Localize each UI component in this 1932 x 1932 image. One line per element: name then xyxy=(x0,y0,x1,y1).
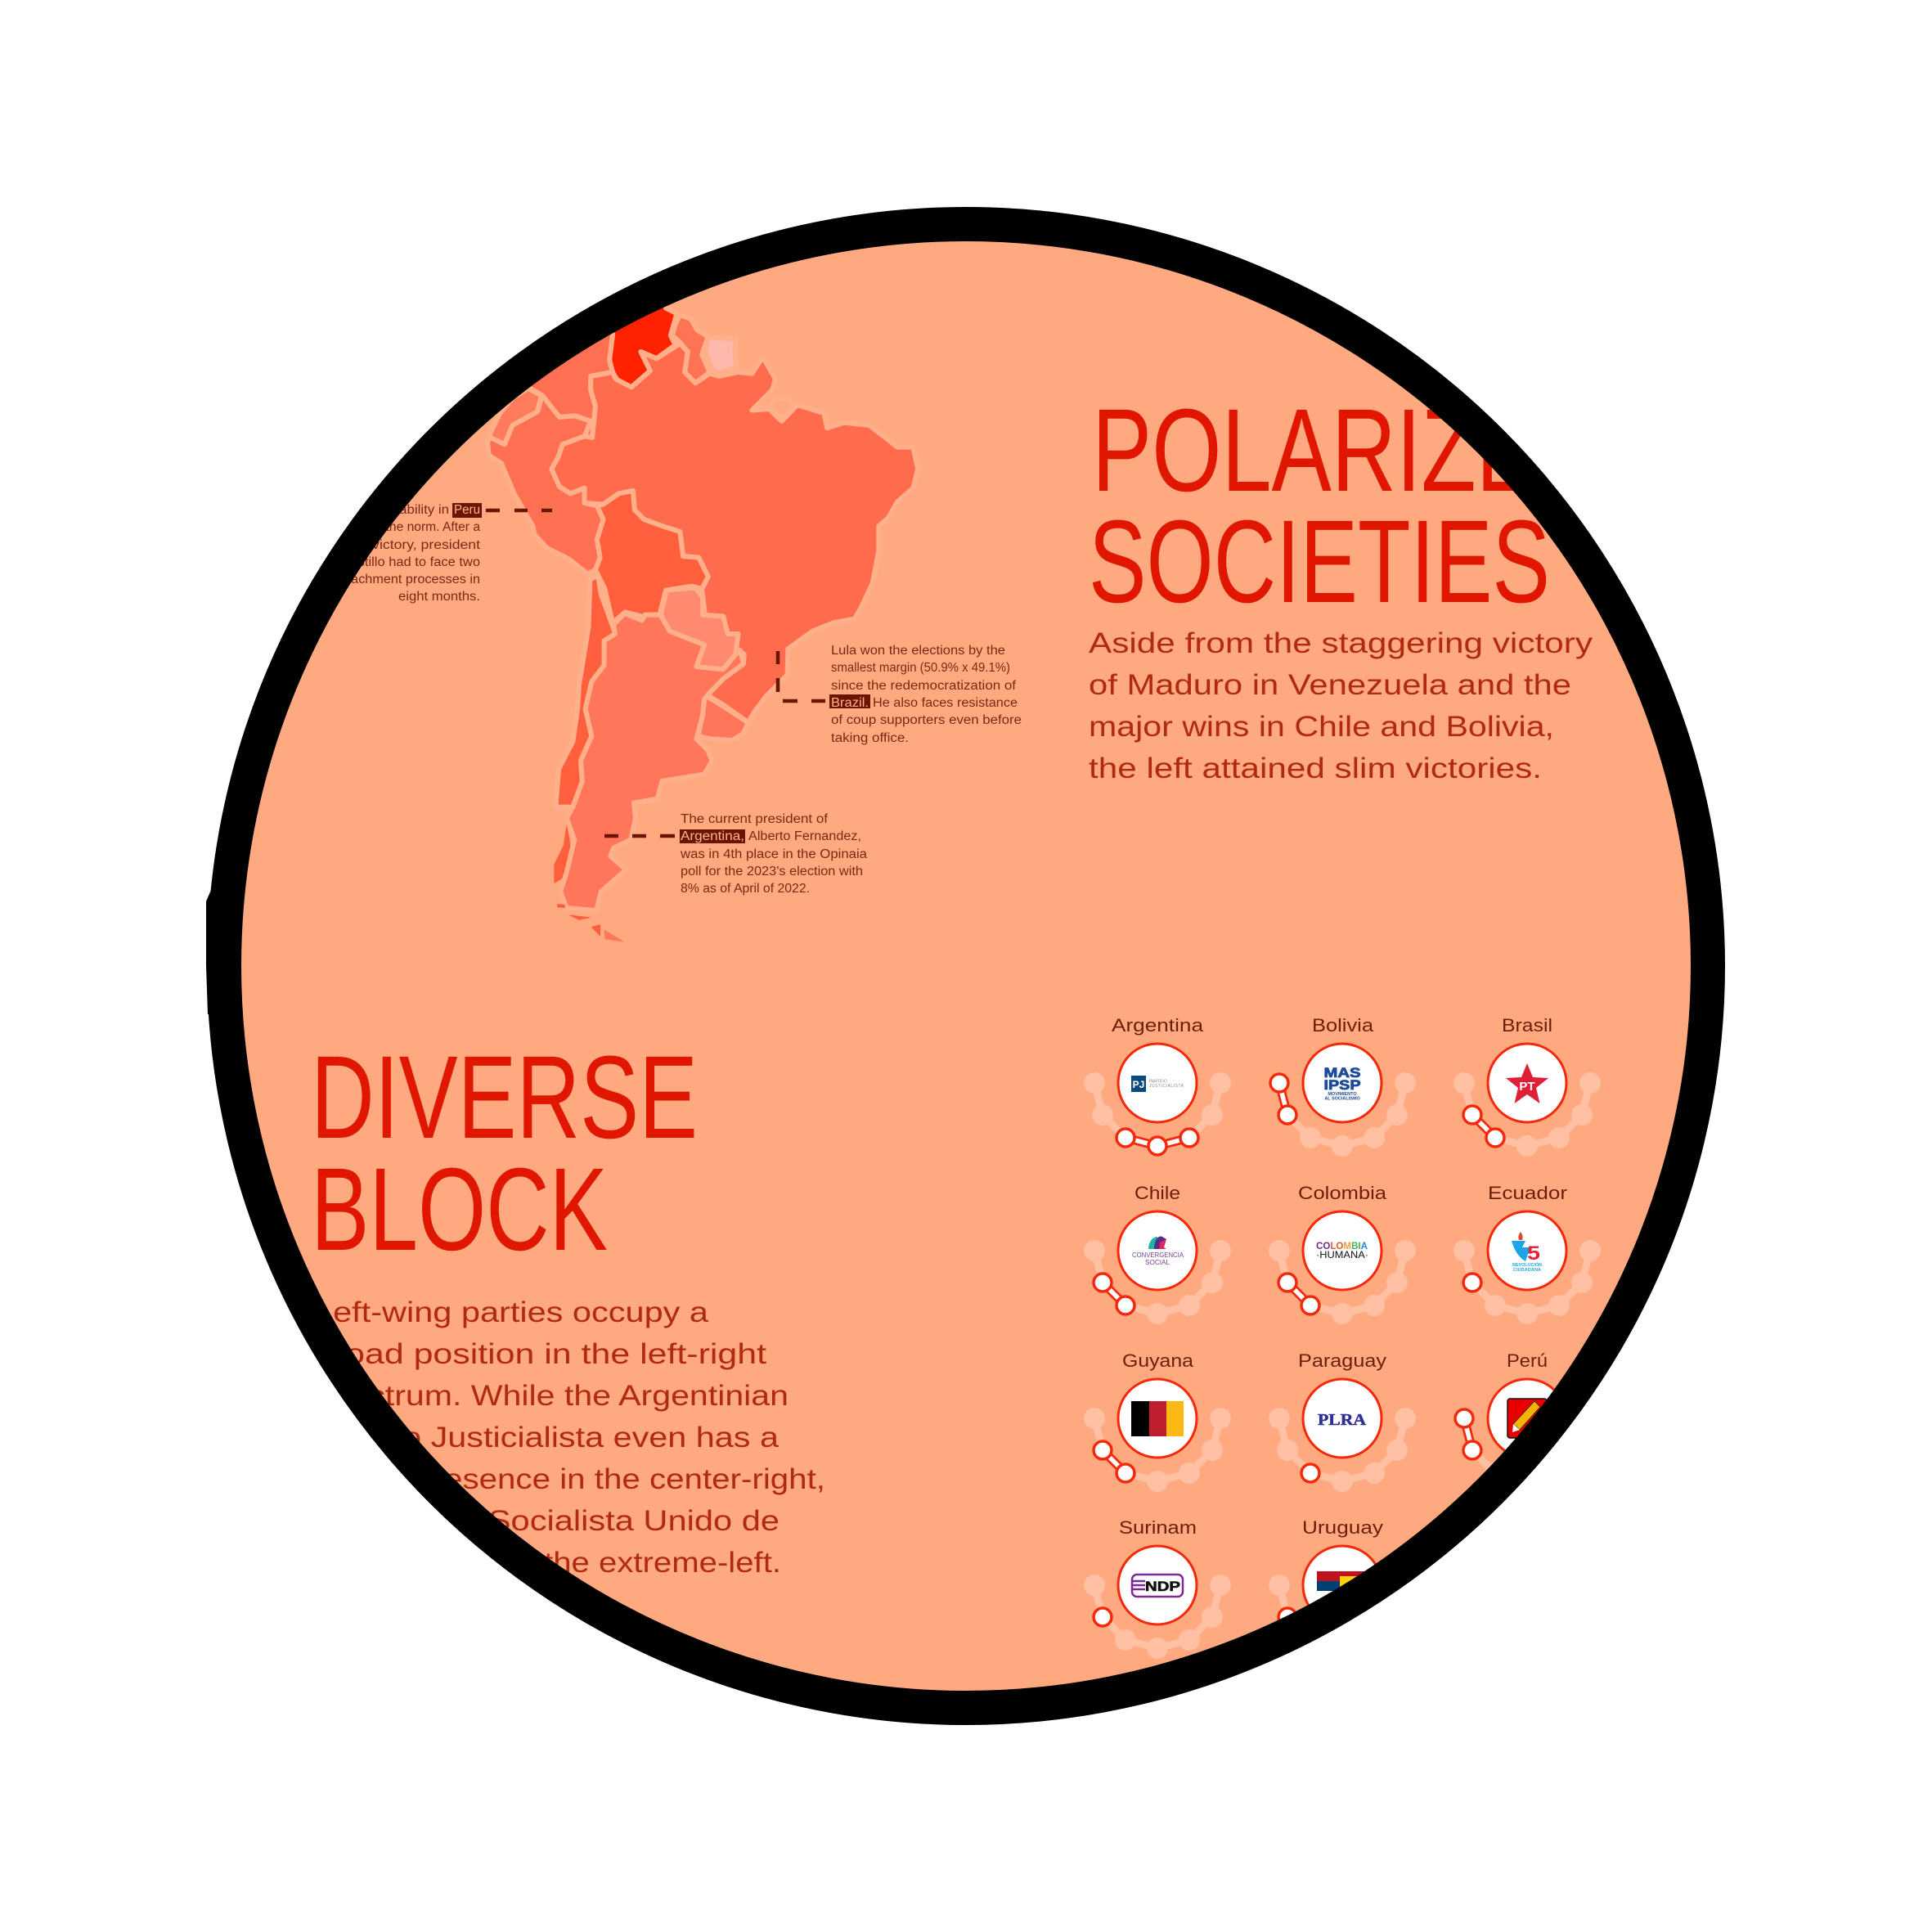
Chile south xyxy=(554,824,571,883)
party: Bolivia: MOVIMIENTO xyxy=(1328,1092,1357,1097)
black ring frame xyxy=(206,224,1708,1708)
Guyana xyxy=(672,315,710,383)
party: Surinam: NDP xyxy=(1145,1579,1180,1594)
text block: diverse block: Left-wing parties occupy a xyxy=(314,1296,709,1328)
Argentina text: was in 4th place in the Opinaia xyxy=(680,847,867,861)
dashed leader Brazil xyxy=(778,651,825,701)
party: Brasil: Brasil xyxy=(1502,1015,1552,1036)
heading: Diverse Block xyxy=(317,1055,694,1251)
party: Chile: Chile xyxy=(1134,1183,1180,1203)
dashed leader Peru xyxy=(486,509,552,512)
party: Bolivia xyxy=(1269,1015,1416,1157)
text block: diverse block: broad position in the left-right xyxy=(314,1338,766,1370)
Bolivia xyxy=(595,491,708,623)
party: Colombia: Colombia xyxy=(1298,1183,1387,1203)
party: Paraguay: PLRA xyxy=(1318,1411,1367,1429)
party: Ecuador: CIUDADANA xyxy=(1513,1268,1541,1273)
clipped content xyxy=(301,278,1601,1659)
heading: Diverse Block: DIVERSE xyxy=(311,1031,698,1163)
Peru text xyxy=(352,504,481,604)
party: Paraguay xyxy=(1269,1350,1416,1492)
party: Ecuador: 5 xyxy=(1527,1242,1540,1265)
Brazil text: taking office. xyxy=(831,731,909,745)
Colombia xyxy=(531,335,610,435)
Argentina text: Argentina, xyxy=(681,829,744,843)
Brazil text xyxy=(831,644,1022,745)
party: Ecuador: REVOLUCIÓN xyxy=(1512,1261,1542,1268)
text block: polarized societies: major wins in Chile and Bolivia, xyxy=(1089,711,1554,743)
party: Colombia: COLOMBIA xyxy=(1316,1240,1368,1251)
highlight Argentina xyxy=(680,829,745,843)
party: Perú: Perú xyxy=(1507,1350,1548,1371)
party: Uruguay xyxy=(1269,1517,1416,1659)
Brazil text: Brazil. xyxy=(831,696,869,710)
Peru xyxy=(487,395,604,574)
map of South America xyxy=(481,278,918,942)
Peru text: tight victory, president xyxy=(341,538,481,552)
party: Argentina: Argentina xyxy=(1112,1015,1204,1036)
Argentina xyxy=(560,613,744,910)
party: Ecuador: Ecuador xyxy=(1488,1183,1567,1203)
Argentina text xyxy=(680,812,867,896)
text block: diverse block: spectrum. While the Argentinian xyxy=(314,1380,789,1412)
party: Colombia: ·HUMANA· xyxy=(1316,1249,1368,1260)
party: Chile: CONVERGENCIA xyxy=(1132,1251,1184,1259)
Chile xyxy=(555,575,615,807)
Brazil text: of coup supporters even before xyxy=(831,713,1022,727)
Peru text: eight months. xyxy=(398,590,480,604)
party: Ecuador xyxy=(1453,1183,1601,1324)
party: Uruguay: Uruguay xyxy=(1302,1517,1383,1538)
Peru text: has been the norm. After a xyxy=(330,520,480,534)
text block: polarized societies: of Maduro in Venezuela and the xyxy=(1089,669,1571,701)
heading: Polarized Societies xyxy=(1093,409,1546,604)
party: Argentina: PJ xyxy=(1133,1079,1144,1090)
party: Argentina: PARTIDO xyxy=(1149,1080,1167,1085)
highlight Peru xyxy=(452,503,482,518)
text block: polarized societies xyxy=(1089,627,1593,784)
party: Paraguay: Paraguay xyxy=(1298,1350,1386,1371)
Peru text: Peru xyxy=(454,503,480,517)
party: Argentina xyxy=(1084,1015,1231,1157)
highlight Brazil xyxy=(829,694,870,708)
Brazil text: He also faces resistance xyxy=(873,696,1018,710)
heading: Polarized Societies: POLARIZED xyxy=(1092,384,1601,516)
background disc xyxy=(230,230,1702,1702)
Peru text: Instability in xyxy=(377,503,449,517)
text block: polarized societies: Aside from the staggering victory xyxy=(1089,627,1593,659)
party: Argentina: JUSTICIALISTA xyxy=(1149,1084,1184,1089)
Tierra del Fuego xyxy=(557,904,625,942)
heading: Diverse Block: BLOCK xyxy=(311,1143,608,1275)
Suriname xyxy=(705,337,736,374)
party: Bolivia: AL SOCIALISMO xyxy=(1324,1096,1361,1101)
Argentina text: Alberto Fernandez, xyxy=(748,829,861,843)
annotation: Brazil xyxy=(778,644,1022,745)
Brazil text: since the redemocratization of xyxy=(831,679,1017,693)
dashed leader Argentina xyxy=(604,834,675,838)
Venezuela xyxy=(607,306,679,384)
annotation: Peru xyxy=(352,503,552,604)
annotation: Argentina xyxy=(604,812,867,896)
party: Chile xyxy=(1084,1183,1231,1324)
party: Surinam: Surinam xyxy=(1119,1517,1197,1538)
text block: diverse block: Venezuela is in the extreme-left. xyxy=(314,1547,781,1579)
Brazil xyxy=(551,344,918,722)
Brazil text: smallest margin (50.9% x 49.1%) xyxy=(831,661,1010,675)
Peru text: impeachment processes in xyxy=(322,573,480,586)
text block: diverse block: Partido Justicialista even has a xyxy=(314,1422,780,1453)
Ecuador xyxy=(487,389,541,444)
Amazon river mouth xyxy=(759,396,795,417)
party: Perú xyxy=(1453,1350,1601,1492)
party: Guyana: Guyana xyxy=(1122,1350,1194,1371)
Argentina text: The current president of xyxy=(681,812,829,826)
text block: diverse block: strong presence in the center-right, xyxy=(314,1463,825,1495)
Paraguay xyxy=(661,587,738,669)
text block: polarized societies: the left attained slim victories. xyxy=(1089,753,1542,784)
Uruguay xyxy=(698,697,748,740)
party: Bolivia: IPSP xyxy=(1323,1077,1361,1093)
party: Brasil: PT xyxy=(1519,1080,1535,1094)
heading: Polarized Societies: SOCIETIES xyxy=(1089,496,1550,627)
party: Brasil xyxy=(1453,1015,1601,1157)
Argentina text: poll for the 2023's election with xyxy=(681,865,863,878)
Brazil text: Lula won the elections by the xyxy=(831,644,1005,658)
text block: diverse block xyxy=(314,1296,825,1579)
party: Chile: SOCIAL xyxy=(1145,1259,1170,1266)
party: Bolivia: Bolivia xyxy=(1312,1015,1374,1036)
party: Surinam xyxy=(1084,1517,1231,1659)
Argentina text: 8% as of April of 2022. xyxy=(681,882,810,896)
party: Guyana xyxy=(1084,1350,1231,1492)
text block: diverse block: the Partido Socialista Unido de xyxy=(314,1505,780,1537)
party: Bolivia: MAS xyxy=(1323,1065,1361,1081)
party: Colombia xyxy=(1269,1183,1416,1324)
Peru text: Pedro Castillo had to face two xyxy=(301,555,480,569)
